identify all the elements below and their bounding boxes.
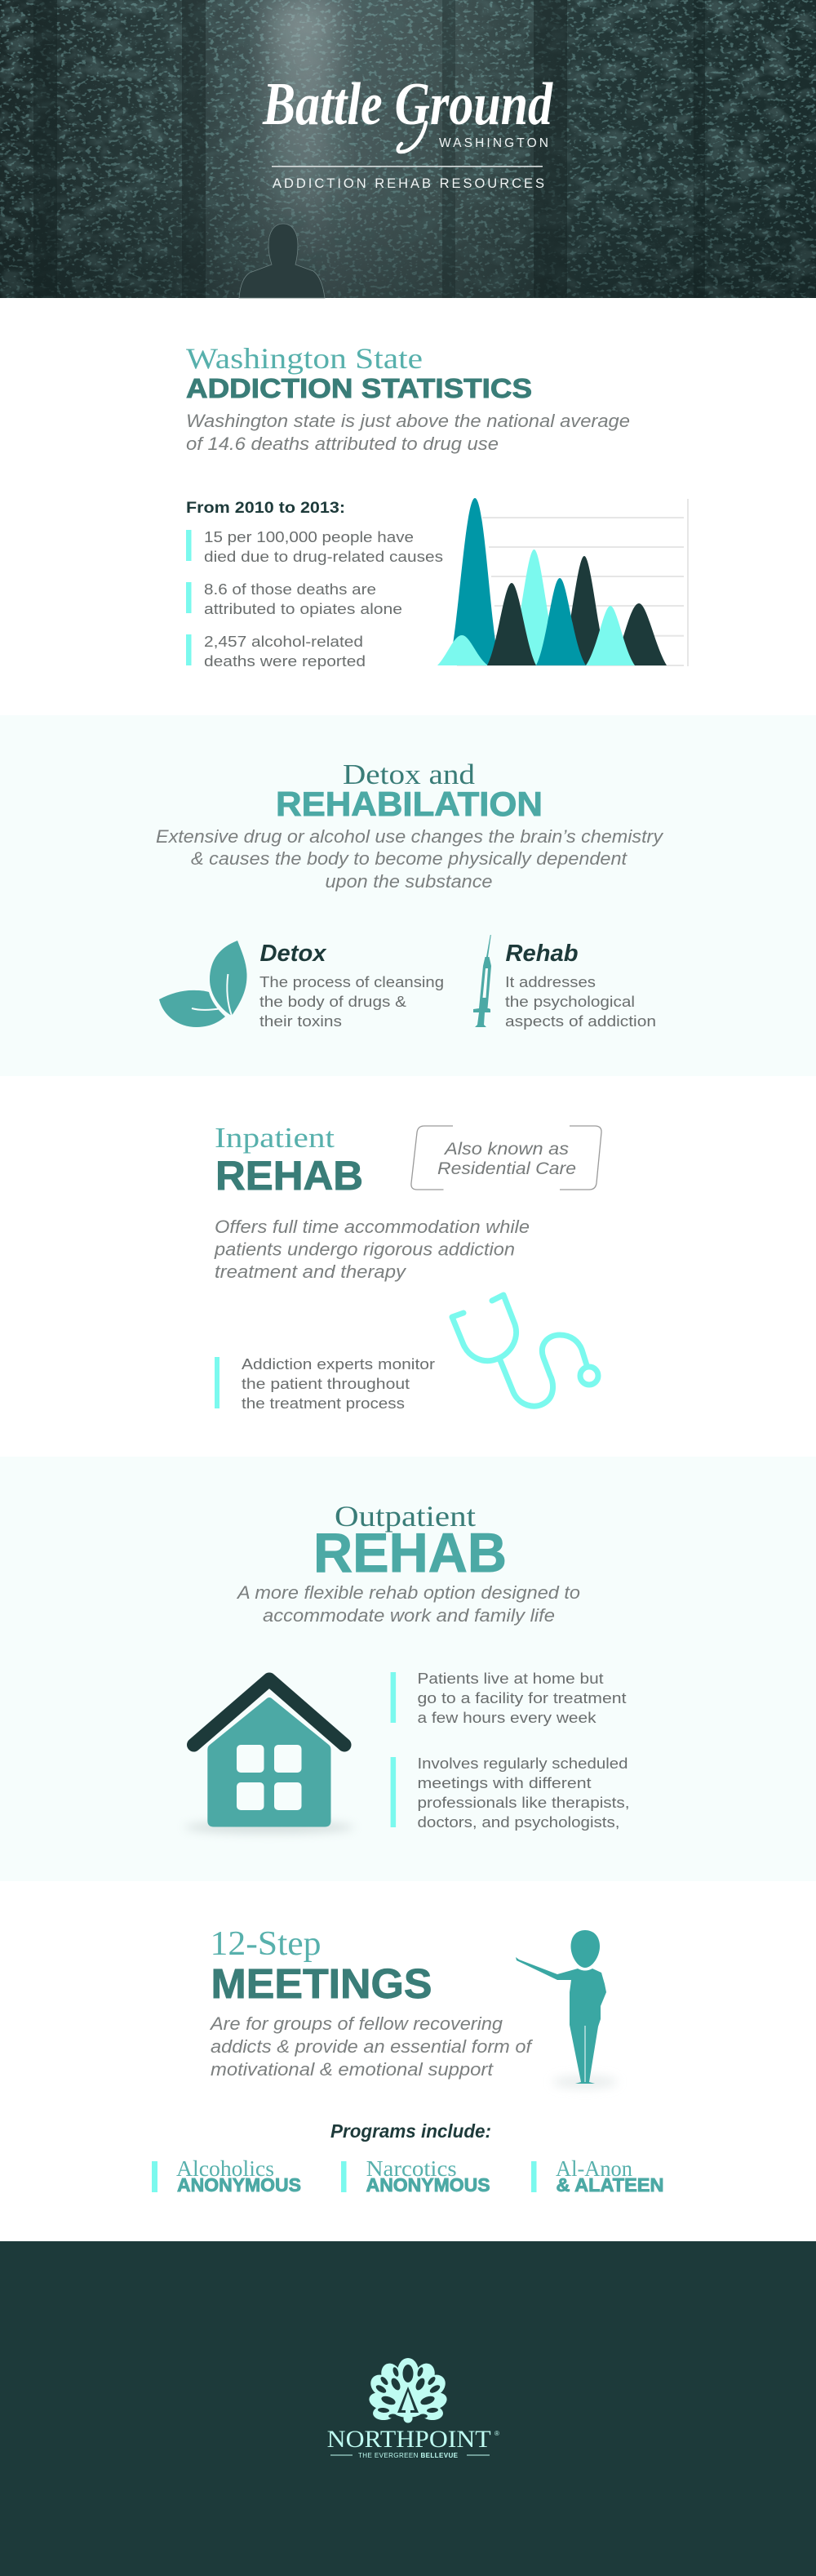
- program: al-anon and alateen: Al-Anon: [556, 2156, 632, 2181]
- text: rehab: It addresses: [505, 974, 596, 990]
- text: flexible option: accommodate work and family life: [263, 1605, 555, 1626]
- text: scheduled meetings: [391, 1755, 630, 1831]
- text: full time accommodation: Offers full time accommodation while: [215, 1217, 530, 1237]
- text: detox: [259, 941, 444, 1030]
- program: alcoholics anonymous: [152, 2156, 301, 2196]
- heading: Rehabilitation: REHABILATION: [276, 785, 543, 823]
- heading: Detox and: Detox and: [343, 759, 476, 790]
- heading: Washington State: Washington State: [186, 342, 423, 375]
- icon: syringe: [473, 935, 491, 1027]
- text: national average: [186, 411, 630, 454]
- text: detox: the body of drugs &: [259, 994, 406, 1010]
- text: Northpoint wordmark: ®: [441, 2400, 446, 2407]
- text: detox: The process of cleansing: [259, 974, 444, 990]
- panel: 12-step meetings: [152, 1925, 664, 2196]
- text: from 2010 to 2013: From 2010 to 2013:: [186, 500, 345, 517]
- program: narcotics anonymous: Narcotics: [366, 2156, 457, 2181]
- program: narcotics anonymous: ANONYMOUS: [366, 2174, 490, 2196]
- program: alcoholics anonymous: ANONYMOUS: [177, 2174, 301, 2196]
- icon: stethoscope: [452, 1295, 598, 1406]
- heading: Meetings: MEETINGS: [211, 1960, 432, 2007]
- text: Northpoint wordmark: [327, 2400, 499, 2459]
- text: fellow recovering addicts: [209, 2013, 534, 2080]
- callout: residential care: Residential Care: [437, 1159, 576, 1178]
- program: alcoholics anonymous: Alcoholics: [176, 2156, 274, 2181]
- text: scheduled meetings: Involves regularly scheduled: [418, 1755, 628, 1772]
- icon: presenter figure: [516, 1930, 618, 2089]
- text: scheduled meetings: meetings with different: [418, 1775, 591, 1791]
- callout: residential care: Also known as: [443, 1140, 570, 1159]
- subtitle: addiction rehab resources: ADDICTION REHAB RESOURCES: [273, 176, 544, 191]
- panel: inpatient rehab: [214, 1122, 601, 1412]
- text: detox: their toxins: [259, 1013, 342, 1030]
- stat: 2,457 alcohol: [186, 634, 366, 670]
- text: fellow recovering addicts: addicts & provide an essential form of: [211, 2036, 534, 2057]
- text: addiction experts: the patient throughout: [242, 1376, 410, 1392]
- text: full time accommodation: patients undergo rigorous addiction: [214, 1239, 515, 1259]
- text: programs include: Programs include:: [330, 2120, 491, 2142]
- stat: 8.6 opiates: 8.6 of those deaths are: [204, 581, 376, 598]
- callout: residential care: [411, 1126, 601, 1190]
- header banner: forest: [0, 0, 816, 298]
- text: Northpoint wordmark: NORTHPOINT: [327, 2426, 491, 2453]
- icon: hooded person: [239, 224, 325, 298]
- text: brain chemistry: Extensive drug or alcohol use changes the brain’s chemistry: [156, 826, 664, 847]
- text: patients live at home: Patients live at home but: [418, 1671, 604, 1687]
- text: addiction experts: [215, 1356, 435, 1412]
- icon: leaves: [159, 941, 247, 1027]
- text: Northpoint wordmark: ®: [494, 2430, 499, 2437]
- text: addiction experts: the treatment process: [242, 1395, 405, 1412]
- stat: 2,457 alcohol: 2,457 alcohol-related: [204, 634, 363, 650]
- text: patients live at home: [391, 1671, 627, 1726]
- text: scheduled meetings: professionals like therapists,: [418, 1795, 630, 1811]
- text: national average: of 14.6 deaths attributed to drug use: [186, 434, 499, 454]
- footer panel: [0, 2241, 816, 2576]
- panel: detox and rehabilitation: [0, 715, 816, 1076]
- text: rehab: aspects of addiction: [505, 1013, 656, 1030]
- program: narcotics anonymous: [341, 2156, 490, 2196]
- subtitle: Washington: WASHINGTON: [439, 136, 548, 150]
- heading: Addiction Statistics: ADDICTION STATISTICS: [186, 374, 532, 404]
- heading: Rehab: REHAB: [215, 1153, 363, 1199]
- text: full time accommodation: treatment and therapy: [215, 1261, 407, 1282]
- text: fellow recovering addicts: Are for groups of fellow recovering: [209, 2013, 503, 2034]
- text: brain chemistry: [156, 826, 664, 892]
- program: al-anon and alateen: & ALATEEN: [557, 2174, 664, 2196]
- stat: 15 per 100,000: died due to drug-related causes: [204, 549, 443, 565]
- text: Northpoint wordmark: THE EVERGREEN BELLEVUE: [358, 2452, 459, 2459]
- text: rehab: Rehab: [506, 941, 578, 967]
- stat: 15 per 100,000: 15 per 100,000 people have: [204, 529, 414, 545]
- text: scheduled meetings: doctors, and psychologists,: [418, 1814, 620, 1831]
- heading: Inpatient: Inpatient: [215, 1122, 335, 1154]
- heading: Outpatient: Outpatient: [335, 1500, 476, 1533]
- text: national average: Washington state is just above the national average: [186, 411, 630, 431]
- text: brain chemistry: & causes the body to become physically dependent: [191, 848, 628, 869]
- heading: 12-Step: 12-Step: [211, 1925, 322, 1963]
- text: brain chemistry: upon the substance: [325, 871, 493, 892]
- text: rehab: the psychological: [505, 994, 635, 1010]
- title: Battle Ground: [262, 71, 553, 152]
- stat: 2,457 alcohol: deaths were reported: [204, 653, 366, 670]
- text: addiction experts: Addiction experts monitor: [242, 1356, 435, 1373]
- text: full time accommodation: [214, 1217, 530, 1282]
- icon: Northpoint peacock logo: [366, 2358, 450, 2423]
- text: flexible option: A more flexible rehab option designed to: [236, 1582, 580, 1603]
- panel: outpatient rehab: [0, 1457, 816, 1881]
- icon: house: [184, 1680, 354, 1833]
- text: patients live at home: a few hours every week: [418, 1710, 597, 1726]
- header divider: [272, 166, 543, 167]
- text: flexible option: [236, 1582, 580, 1626]
- stat: 15 per 100,000: [186, 529, 443, 565]
- stat: 8.6 opiates: attributed to opiates alone: [204, 601, 402, 617]
- title: Battle Ground: Battle Ground: [262, 71, 553, 138]
- text: detox: Detox: [259, 941, 327, 967]
- program: al-anon and alateen: [531, 2156, 664, 2196]
- heading: Rehab: REHAB: [313, 1522, 507, 1584]
- stat: 8.6 opiates: [186, 581, 402, 617]
- panel: addiction statistics: [186, 342, 688, 670]
- chart: peaks: [437, 498, 688, 666]
- text: patients live at home: go to a facility for treatment: [418, 1690, 627, 1706]
- text: rehab: [505, 941, 656, 1030]
- text: fellow recovering addicts: motivational & emotional support: [211, 2059, 494, 2080]
